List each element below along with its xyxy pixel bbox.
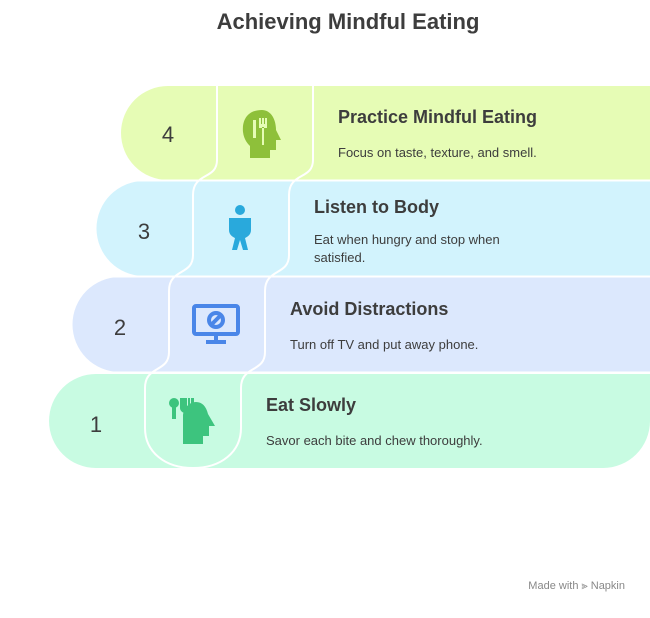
row 2: avoid distractions: Avoid Distractions (290, 299, 448, 319)
title: Achieving Mindful Eating (217, 9, 479, 34)
row 2: avoid distractions (72, 277, 650, 372)
decorative dividers (0, 86, 650, 468)
row 3: listen to body: Eat when hungry and stop when (314, 232, 500, 247)
row 4: practice mindful eating: Focus on taste, texture, and smell. (338, 145, 537, 160)
row 4: practice mindful eating: Practice Mindful Eating (338, 107, 537, 127)
icon: head with fork (243, 110, 281, 158)
row 3: listen to body: satisfied. (314, 250, 365, 265)
row 1: eat slowly (49, 374, 650, 468)
row 1: eat slowly: Savor each bite and chew thoroughly. (266, 433, 483, 448)
icon: head with spoon and fork (169, 398, 215, 444)
row 4: practice mindful eating (121, 86, 650, 180)
row 3: listen to body (96, 181, 650, 276)
row 1: eat slowly: 1 (90, 412, 102, 437)
row 1: eat slowly: Eat Slowly (266, 395, 356, 415)
row 4: practice mindful eating: 4 (162, 122, 174, 147)
row 3: listen to body: 3 (138, 219, 150, 244)
row 2: avoid distractions: Turn off TV and put away phone. (290, 337, 478, 352)
row 2: avoid distractions: 2 (114, 315, 126, 340)
icon: person (229, 205, 251, 250)
row 3: listen to body: Listen to Body (314, 197, 439, 217)
footer credit: Made with ⫸ Napkin (528, 580, 625, 592)
icon: monitor with no sign (194, 306, 238, 342)
